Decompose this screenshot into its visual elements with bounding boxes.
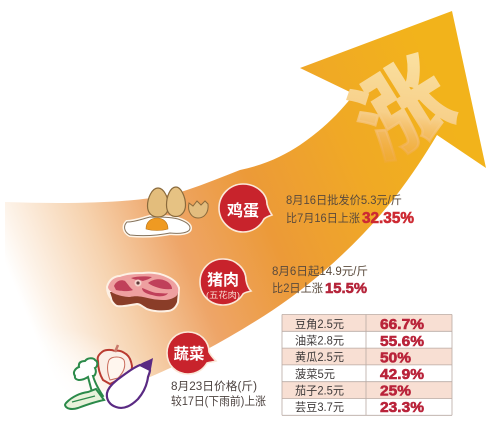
row 6: 23.3% [380,399,424,416]
side crust [110,292,178,310]
row 3: 50% [380,350,411,366]
cucumber stripe [72,396,95,402]
lean lobes [114,276,172,296]
left egg [148,188,168,217]
pork price text: 15.5% [325,280,367,297]
icon: eggs [125,187,208,236]
broken shell [189,201,208,218]
bubble: vegetables: 蔬菜 [174,345,205,363]
pepper [98,350,132,384]
row 1 [295,316,424,333]
row 6: 芸豆3.7元 [295,401,344,414]
bubble: pork: (五花肉) [206,290,240,300]
pork price text: 8月6日起14.9元/斤 [272,265,368,278]
broccoli [74,358,103,400]
row 2: 油菜2.8元 [295,334,344,348]
pork price text [272,265,368,297]
egg price text [286,193,414,227]
cucumber [65,389,104,409]
row 5: 25% [380,382,411,400]
pepper stem [115,345,118,352]
vegetable caption [171,379,266,408]
pepper inner [108,357,125,380]
row 5: 茄子2.5元 [295,384,344,398]
row 4 [295,366,424,383]
top face [108,274,178,300]
egg price text: 8月16日批发价5.3元/斤 [286,193,402,207]
bubble: vegetables [167,332,216,374]
icon: pork steak [108,274,178,310]
big character: zhang: 涨 [325,23,473,184]
vegetable caption: 8月23日价格(斤) [171,379,257,393]
row 5 [295,382,411,400]
row 1: 66.7% [380,316,424,333]
egg yolk [146,218,168,230]
row 6 [295,399,424,416]
row 2 [295,333,424,350]
row 4: 菠菜5元 [295,368,335,381]
fried egg [125,217,190,236]
icon: vegetables [65,345,153,409]
vegetable caption: 较17日(下雨前)上涨 [171,394,266,408]
eggplant [107,365,150,408]
pork price text: 比2日上涨 [272,282,323,295]
table: vegetable prices [282,314,452,416]
bone ring [134,280,142,286]
row 3: 黄瓜2.5元 [295,350,344,364]
egg price text: 32.35% [362,210,414,227]
egg price text: 比7月16日上涨 [286,212,360,225]
row 1: 豆角2.5元 [295,318,344,331]
bubble: eggs [219,184,272,232]
bubble: pork: 猪肉 [207,271,239,289]
right egg [166,187,186,216]
eggplant cap [139,358,153,370]
row 4: 42.9% [380,366,424,383]
bubble: pork [200,259,251,305]
bubble: eggs: 鸡蛋 [227,202,259,220]
row 3 [295,350,411,366]
row 2: 55.6% [380,333,424,350]
